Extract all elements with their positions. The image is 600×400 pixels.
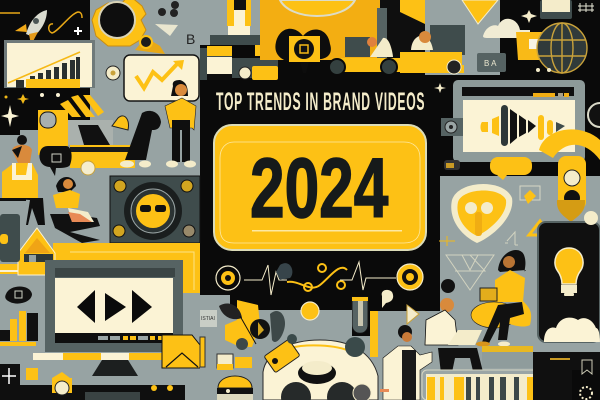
- panel: right gray column: [440, 176, 600, 400]
- icon: triangle network: [439, 232, 518, 290]
- panel: bottom-right dark tile: [533, 352, 600, 400]
- panel: top-centre figure and machinery: [200, 0, 282, 80]
- icon: molecule and letter B: B: [186, 31, 195, 47]
- figure: man with laptop: [425, 279, 492, 383]
- panel: yellow machine: [38, 110, 135, 168]
- panel: gear and lens: [92, 0, 165, 54]
- panel: yellow block with dish: [260, 0, 380, 80]
- panel: growth chart: [4, 40, 95, 88]
- icon: stripes: [60, 95, 104, 117]
- panel: tablet: [0, 214, 20, 262]
- icon: ring and play triangle: [397, 264, 423, 324]
- icon: molecule and letter B: [155, 1, 195, 47]
- figure: woman seated with laptop: [471, 250, 533, 368]
- panel: phone with bulb: [538, 211, 600, 342]
- icon: coin: [301, 302, 319, 320]
- icon: hard hat: [217, 376, 253, 400]
- panel: lower-centre gray area: ISTIAI: [201, 316, 215, 322]
- icon: globe: [537, 23, 587, 73]
- panel: lower-centre gray area: [200, 295, 440, 400]
- panel: barcode strip: [422, 370, 572, 400]
- icon: small tags: [200, 337, 233, 370]
- icon: yellow speech tag: [444, 157, 532, 180]
- icon: rocket: [15, 10, 47, 45]
- panel: main yellow plaque: [214, 125, 426, 250]
- panel: player window: [453, 80, 585, 162]
- icon: heart and frame: [520, 186, 585, 222]
- title: TOP TRENDS IN BRAND VIDEOS: [216, 88, 425, 116]
- text: 2024: 2024: [250, 141, 388, 235]
- icon: leaves and puzzle: [219, 300, 285, 368]
- panel: bottom-left dark tiles: [0, 364, 185, 400]
- icon: film gear: [275, 29, 331, 73]
- chart: small bar chart: [0, 286, 38, 346]
- panel: chart bubble: [124, 55, 199, 101]
- panel: top-right vehicle and triangle: [400, 0, 506, 75]
- figure: sitting man: [0, 135, 45, 225]
- icon: film reel: [263, 334, 378, 400]
- figure: woman with laptop: [50, 177, 100, 243]
- panel: monitor: [33, 260, 183, 376]
- icon: sparkles: [1, 93, 60, 127]
- icon: yellow arc and dial: [539, 103, 600, 210]
- icon: phone and hash: [540, 0, 594, 19]
- icon: keyhole emblem: [451, 184, 512, 243]
- figure: standing person in yellow: [165, 80, 196, 168]
- icon: speech bubble: [39, 146, 95, 176]
- icon: folder: [162, 335, 204, 368]
- figure: bending person: [120, 111, 161, 168]
- icons: sparkles: [434, 10, 551, 93]
- figure: man at left: [380, 325, 432, 400]
- icon: curved line with sparkle: [0, 12, 82, 35]
- icon: cloud and photo card: [483, 19, 554, 60]
- icon: warning triangle: [529, 221, 550, 235]
- panel: speaker: [110, 176, 200, 243]
- icon: camera: [441, 118, 463, 136]
- panel: yellow band: [0, 243, 200, 293]
- panel: top-left gray backdrop: [0, 0, 200, 400]
- icon: test tube: [352, 290, 393, 333]
- icon: waveform connector: [216, 262, 396, 295]
- panel: forklift vehicle: [329, 0, 440, 75]
- icon: house tag: [18, 228, 55, 275]
- icon: eye: [106, 66, 120, 80]
- panel: top-right vehicle and triangle: B A: [484, 59, 497, 68]
